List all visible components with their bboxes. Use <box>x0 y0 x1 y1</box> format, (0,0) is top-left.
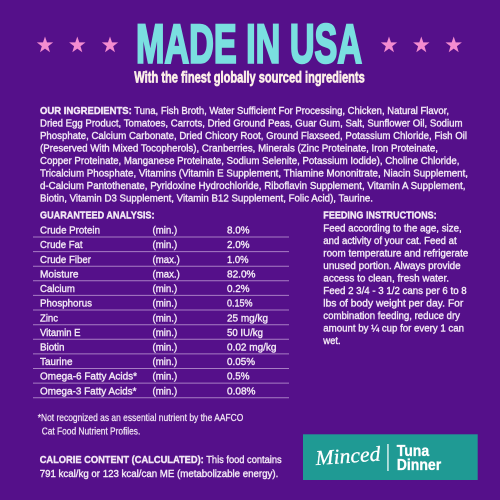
icon: right stars <box>381 36 462 52</box>
table: guaranteed analysis: Crude Fat <box>40 239 83 251</box>
table: guaranteed analysis: Calcium <box>40 283 75 295</box>
table: guaranteed analysis <box>33 225 289 398</box>
table: guaranteed analysis: (min.) <box>152 342 177 354</box>
ingredients text block: Copper Proteinate, Manganese Proteinate, Sodium Selenite, Potassium Iodide), Choline Chloride, <box>40 155 460 167</box>
feeding instructions text block: combination feeding, reduce dry <box>323 310 461 322</box>
table: guaranteed analysis: Vitamin E <box>40 327 80 339</box>
feeding instructions text block: wet. <box>322 335 341 347</box>
table: guaranteed analysis: Taurine <box>40 356 73 368</box>
icon: left stars <box>37 36 118 52</box>
feeding instructions text block: and activity of your cat. Feed at <box>323 235 457 247</box>
table: guaranteed analysis: 2.0% <box>227 239 250 251</box>
product label badge: Dinner <box>397 457 441 474</box>
product label badge: Minced <box>314 441 382 470</box>
table: guaranteed analysis: Phosphorus <box>40 298 92 310</box>
calorie content <box>40 454 282 480</box>
calorie content: CALORIE CONTENT (CALCULATED): This food contains <box>40 454 282 466</box>
feeding instructions text block: lbs of body weight per day. For <box>323 298 464 310</box>
table: guaranteed analysis: 8.0% <box>227 225 250 237</box>
heading: guaranteed analysis: GUARANTEED ANALYSIS: <box>40 209 154 221</box>
table: guaranteed analysis: Crude Protein <box>40 225 100 237</box>
ingredients text block: OUR INGREDIENTS: Tuna, Fish Broth, Water Sufficient For Processing, Chicken, Natural Flavor, <box>40 105 449 117</box>
table: guaranteed analysis: (max.) <box>152 268 180 280</box>
ingredients text block: Biotin, Vitamin D3 Supplement, Vitamin B12 Supplement, Folic Acid), Taurine. <box>40 193 373 205</box>
feeding instructions text block <box>322 209 468 347</box>
ingredients text block: (Preserved With Mixed Tocopherols), Cranberries, Minerals (Zinc Proteinate, Iron Proteinate, <box>40 142 438 154</box>
feeding instructions text block: room temperature and refrigerate <box>323 248 468 260</box>
feeding instructions text block: Feed 2 3/4 - 3 1/2 cans per 6 to 8 <box>323 285 467 297</box>
footnote: Cat Food Nutrient Profiles. <box>42 426 140 438</box>
table: guaranteed analysis: 0.05% <box>227 356 255 368</box>
title: MADE IN USA <box>136 13 362 75</box>
table: guaranteed analysis: (min.) <box>152 312 177 324</box>
table: guaranteed analysis: 0.08% <box>227 385 256 397</box>
table: guaranteed analysis: 1.0% <box>227 254 248 266</box>
table: guaranteed analysis: (min.) <box>152 327 177 339</box>
subtitle: With the finest globally sourced ingredients <box>134 70 365 86</box>
feeding instructions text block: FEEDING INSTRUCTIONS: <box>323 209 437 221</box>
table: guaranteed analysis: (min.) <box>152 283 177 295</box>
footnote: *Not recognized as an essential nutrient by the AAFCO <box>38 412 243 424</box>
table: guaranteed analysis: Crude Fiber <box>40 254 91 266</box>
feeding instructions text block: amount by ¼ cup for every 1 can <box>323 322 464 334</box>
product label badge: Tuna <box>397 443 430 460</box>
ingredients text block <box>40 105 468 205</box>
table: guaranteed analysis: 0.02 mg/kg <box>227 342 277 354</box>
table: guaranteed analysis: (min.) <box>152 356 177 368</box>
ingredients text block: Dried Egg Product, Tomatoes, Carrots, Dried Ground Peas, Guar Gum, Salt, Sunflower Oil, Sodium <box>40 118 463 130</box>
table: guaranteed analysis: (min.) <box>152 298 177 310</box>
table: guaranteed analysis: 25 mg/kg <box>227 312 268 324</box>
feeding instructions text block: access to clean, fresh water. <box>323 272 449 284</box>
feeding instructions text block: Feed according to the age, size, <box>323 222 462 234</box>
table: guaranteed analysis: Omega-3 Fatty Acids* <box>40 385 136 397</box>
ingredients text block: Tricalcium Phosphate, Vitamins (Vitamin E Supplement, Thiamine Mononitrate, Niacin Supplement, <box>40 168 468 180</box>
feeding instructions text block: unused portion. Always provide <box>323 260 461 272</box>
table: guaranteed analysis: Moisture <box>40 268 79 280</box>
table: guaranteed analysis: (min.) <box>152 225 177 237</box>
footnote <box>38 412 243 438</box>
table: guaranteed analysis: (max.) <box>152 254 180 266</box>
ingredients text block: d-Calcium Pantothenate, Pyridoxine Hydrochloride, Riboflavin Supplement, Vitamin A Supplement, <box>40 180 466 192</box>
ingredients text block: Phosphate, Calcium Carbonate, Dried Chicory Root, Ground Flaxseed, Potassium Chloride, Fish Oil <box>40 130 467 142</box>
table: guaranteed analysis: (min.) <box>152 385 177 397</box>
table: guaranteed analysis: 0.15% <box>227 298 252 310</box>
table: guaranteed analysis: Biotin <box>40 342 65 354</box>
table: guaranteed analysis: Omega-6 Fatty Acids* <box>40 371 137 383</box>
table: guaranteed analysis: (min.) <box>152 371 177 383</box>
table: guaranteed analysis: 50 IU/kg <box>227 327 263 339</box>
table: guaranteed analysis: 82.0% <box>227 268 256 280</box>
table: guaranteed analysis: 0.5% <box>227 371 250 383</box>
table: guaranteed analysis: 0.2% <box>227 283 250 295</box>
calorie content: 791 kcal/kg or 123 kcal/can ME (metabolizable energy). <box>40 468 278 480</box>
table: guaranteed analysis: (min.) <box>152 239 177 251</box>
table: guaranteed analysis: Zinc <box>40 312 58 324</box>
product label badge <box>303 434 478 480</box>
